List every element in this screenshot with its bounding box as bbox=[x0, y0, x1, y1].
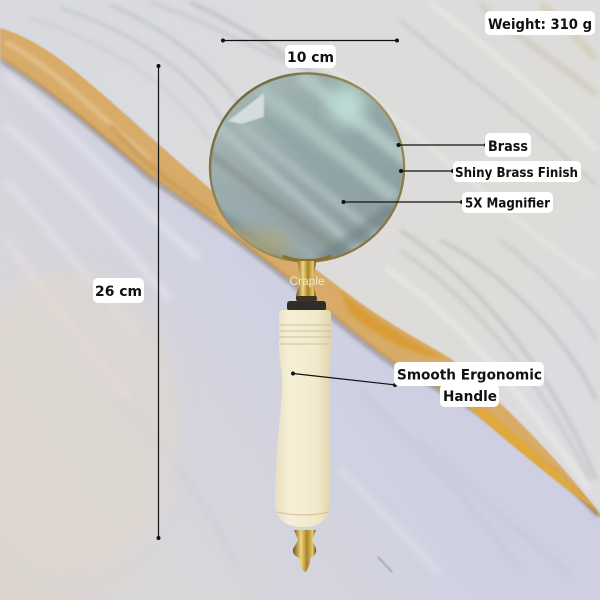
label: shiny brass finish: Shiny Brass Finish bbox=[455, 166, 578, 181]
arrow: 5X magnifier bbox=[342, 200, 464, 204]
label: shiny brass finish bbox=[453, 161, 581, 182]
arrow: ergonomic handle bbox=[291, 372, 397, 387]
label: brass: Brass bbox=[488, 139, 528, 155]
icon: brass finial bbox=[293, 530, 316, 572]
label: smooth ergonomic handle: Smooth Ergonomic bbox=[397, 368, 542, 384]
arrow: shiny brass finish bbox=[399, 169, 455, 173]
icon: brass ring and lens bbox=[205, 74, 420, 265]
label: weight: Weight: 310 g bbox=[488, 17, 592, 33]
label: brass bbox=[485, 133, 531, 157]
label: 10 cm: 10 cm bbox=[287, 50, 334, 66]
label: 5X magnifier: 5X Magnifier bbox=[465, 196, 551, 212]
label: weight bbox=[485, 11, 595, 35]
label: 10 cm bbox=[285, 45, 336, 68]
dimension arrow: height bbox=[156, 64, 160, 540]
label: 26 cm bbox=[93, 278, 144, 303]
label: 26 cm: 26 cm bbox=[95, 284, 142, 300]
label: smooth ergonomic handle bbox=[394, 362, 544, 407]
icon: brand watermark: Craple bbox=[289, 274, 325, 288]
label: smooth ergonomic handle: Handle bbox=[443, 389, 497, 405]
dimension arrow: width bbox=[221, 38, 399, 42]
magnifier bbox=[205, 74, 420, 572]
label: 5X magnifier bbox=[462, 192, 553, 213]
icon: ivory handle bbox=[275, 310, 331, 527]
arrow: brass bbox=[396, 143, 488, 147]
icon: brass neck and collar bbox=[287, 261, 326, 311]
